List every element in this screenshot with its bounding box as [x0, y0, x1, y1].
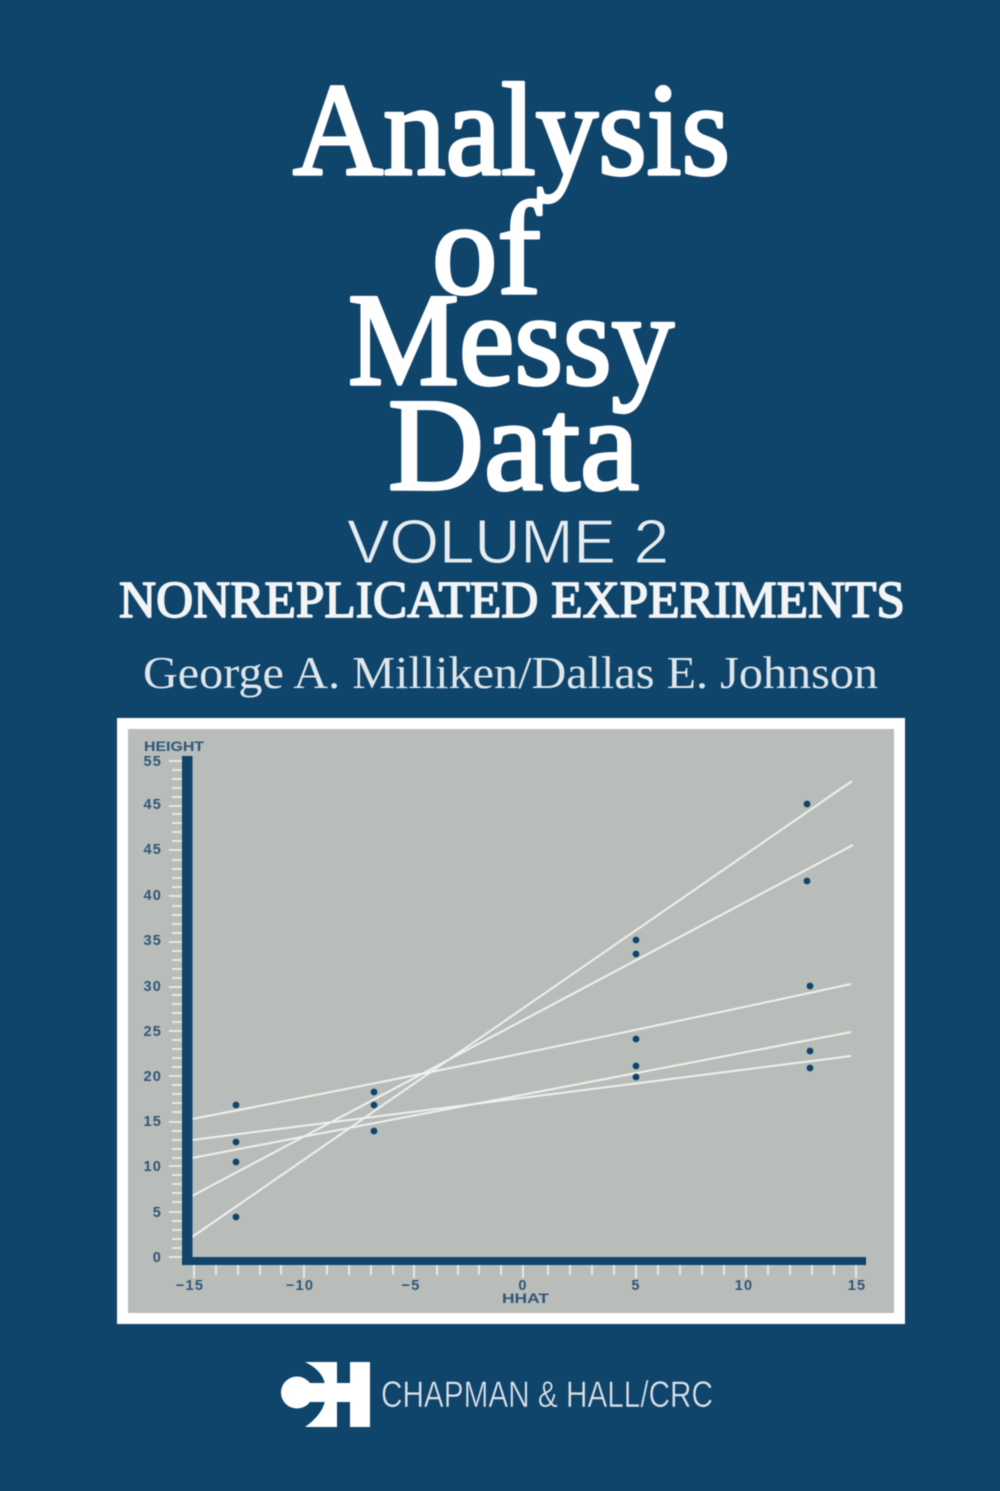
y axis labels: 30: [143, 979, 162, 995]
subtitle: NONREPLICATED EXPERIMENTS: [119, 572, 905, 629]
title: [293, 56, 730, 518]
publisher logo: [281, 1362, 370, 1427]
y axis labels: [143, 754, 162, 1266]
y axis labels: 55: [143, 754, 162, 770]
y axis labels: 5: [153, 1205, 162, 1221]
x axis labels: [176, 1278, 866, 1294]
title: of: [432, 175, 541, 322]
y axis labels: 40: [143, 888, 162, 904]
x axis labels: 0: [518, 1278, 528, 1294]
axes: [182, 756, 866, 1265]
data points: [233, 801, 813, 1220]
x axis labels: −10: [286, 1278, 314, 1294]
y axis labels: 45: [143, 797, 162, 813]
chart panel: [117, 718, 905, 1324]
y axis labels: 10: [143, 1159, 162, 1175]
y axis ticks: [169, 761, 182, 1257]
x axis labels: −5: [402, 1278, 420, 1294]
y axis labels: 25: [143, 1024, 162, 1040]
publisher name: CHAPMAN & HALL/CRC: [381, 1374, 713, 1415]
title: Data: [388, 371, 639, 518]
x axis labels: −15: [176, 1278, 204, 1294]
x axis title: HHAT: [502, 1290, 550, 1306]
volume label: VOLUME 2: [347, 508, 669, 577]
title: Analysis: [293, 56, 730, 203]
authors: George A. Milliken/Dallas E. Johnson: [143, 647, 878, 698]
x axis labels: 5: [631, 1278, 641, 1294]
y axis labels: 45: [143, 842, 162, 858]
x axis labels: 15: [848, 1278, 866, 1294]
y axis labels: 35: [143, 933, 162, 949]
regression lines: [192, 781, 853, 1237]
y axis labels: 20: [143, 1069, 162, 1085]
x axis ticks: [194, 1265, 856, 1278]
y axis labels: 0: [153, 1250, 162, 1266]
title: Messy: [348, 266, 674, 413]
x axis labels: 10: [735, 1278, 753, 1294]
y axis title: HEIGHT: [144, 738, 205, 754]
y axis labels: 15: [143, 1114, 162, 1130]
